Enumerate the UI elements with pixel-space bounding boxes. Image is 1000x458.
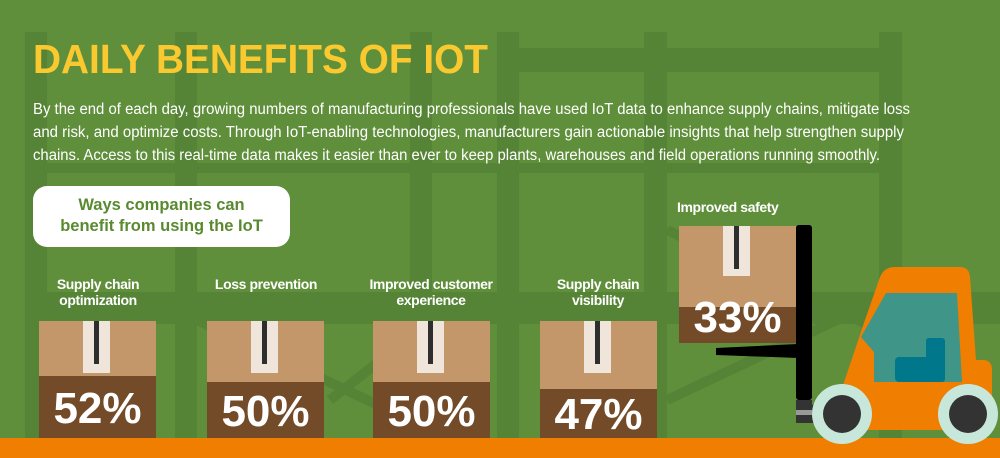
label: improved customer experience [369,276,493,308]
callout: Ways companies can [78,196,245,214]
label: supply chain optimization: Supply chain [57,276,139,292]
intro text [33,101,910,164]
box: 50% [207,321,324,438]
label: improved safety: Improved safety [677,199,778,215]
label: supply chain visibility [557,276,639,308]
forklift [716,225,998,444]
callout: benefit from using the IoT [60,217,263,235]
box: 33%: 33% [693,293,782,342]
box: 33% [679,226,796,343]
intro text: chains. Access to this real-time data makes it easier than ever to keep plants, warehouses and field operations running smoothly. [33,147,880,164]
box: 50% [373,321,490,438]
box: 52%: 52% [53,384,142,433]
floor [0,438,1000,458]
label: loss prevention: Loss prevention [215,276,317,292]
label: supply chain visibility: visibility [572,292,624,308]
box: 52% [39,321,156,438]
intro text: and risk, and optimize costs. Through IoT-enabling technologies, manufacturers gain actionable insights that help strengthen supply [33,124,904,141]
box: 47% [540,321,657,438]
intro text: By the end of each day, growing numbers of manufacturing professionals have used IoT data to enhance supply chains, mitigate loss [33,101,910,118]
box: 47%: 47% [554,390,643,439]
cab [838,267,992,430]
box: 50%: 50% [387,387,476,436]
wheels [812,384,998,444]
label: improved customer experience: experience [396,292,466,308]
label: supply chain optimization [57,276,139,308]
mast and fork [716,225,840,423]
label: supply chain optimization: optimization [59,292,137,308]
label: supply chain visibility: Supply chain [557,276,639,292]
box: 50%: 50% [221,387,310,436]
callout [33,186,290,247]
label: improved customer experience: Improved customer [369,276,493,292]
